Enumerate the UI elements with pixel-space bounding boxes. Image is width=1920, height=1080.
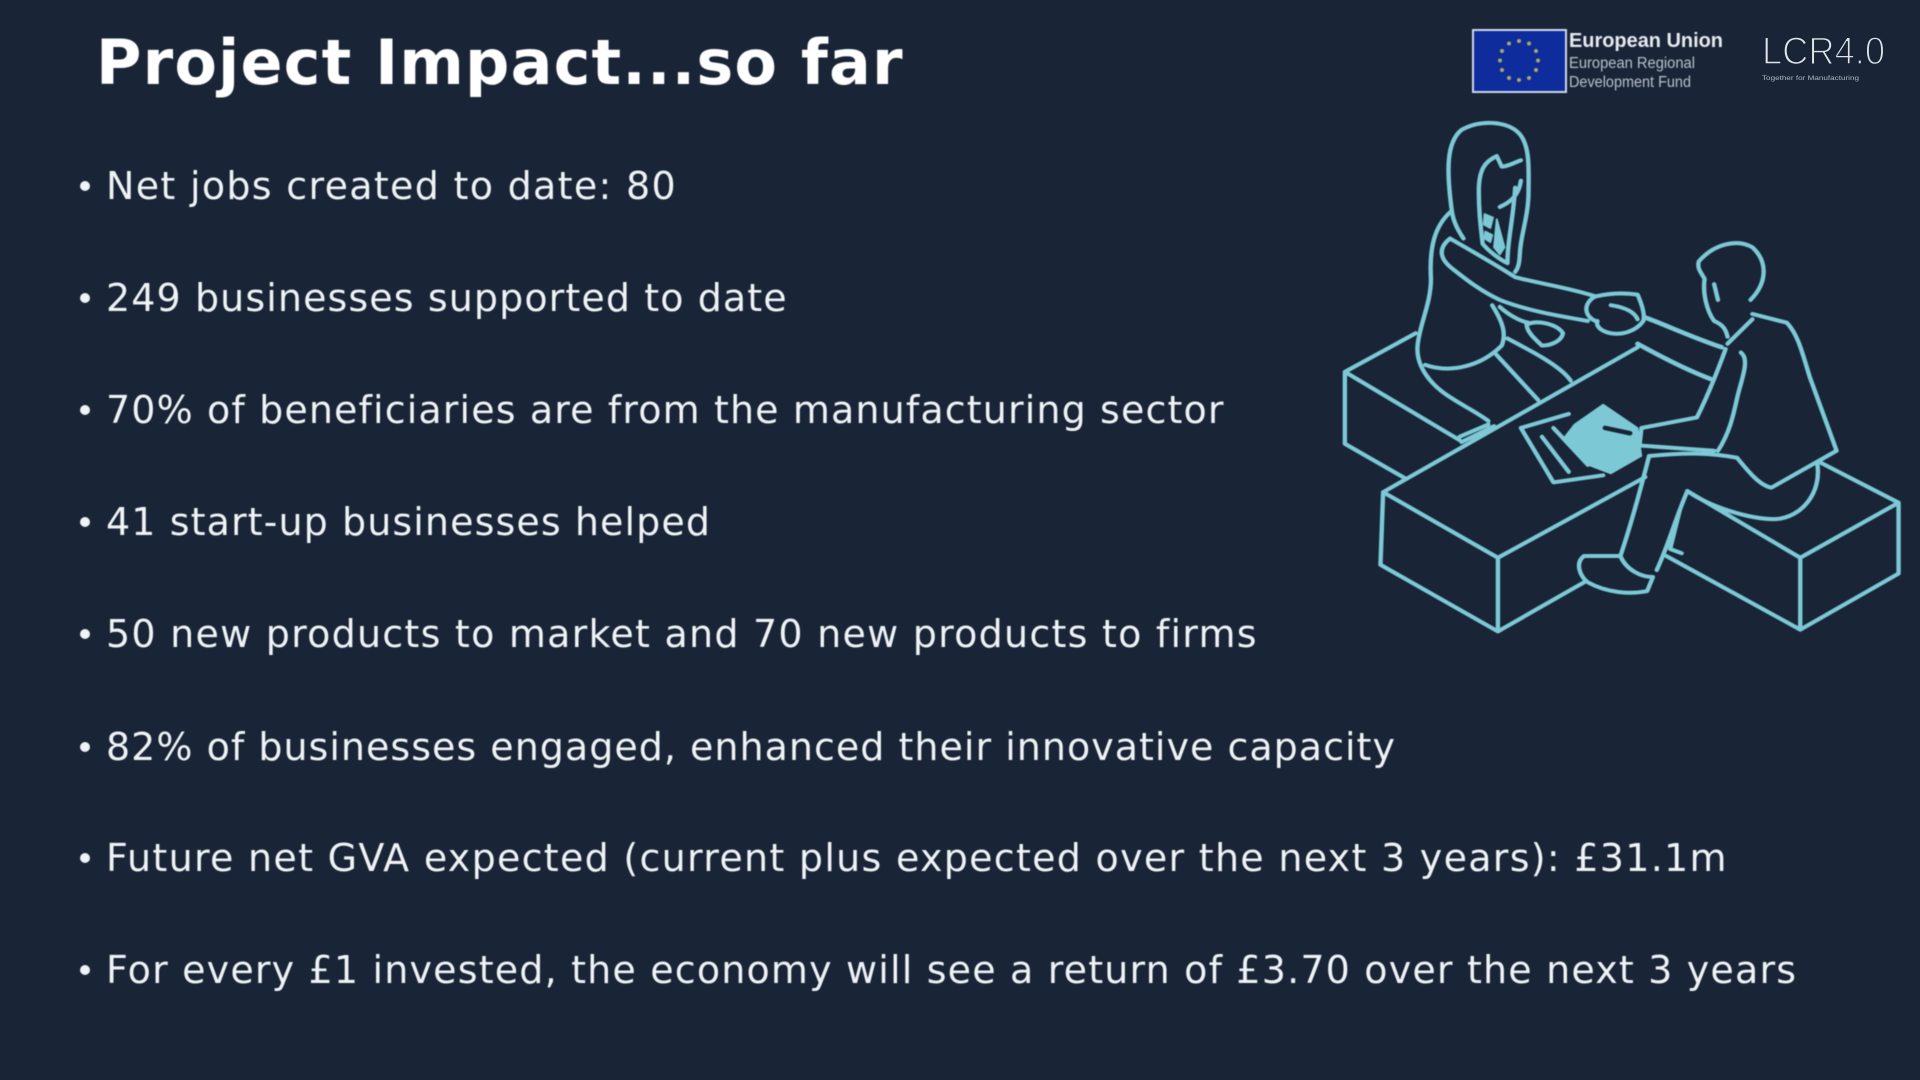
logo: European Union	[1471, 28, 1723, 94]
logo: LCR4.0: Together for Manufacturing	[1762, 75, 1859, 82]
bullet: manufacturing share: 70% of beneficiaries are from the manufacturing sector	[106, 388, 1225, 432]
EU logo text: European Regional	[1569, 55, 1695, 72]
bullet: innovative capacity: 82% of businesses engaged, enhanced their innovative capacity	[106, 725, 1396, 769]
illustration: two people shaking hands across a desk	[1342, 120, 1902, 634]
EU logo text: Development Fund	[1569, 74, 1691, 91]
book and papers on desk	[1521, 404, 1641, 482]
desk block	[1380, 347, 1645, 631]
man figure	[1579, 243, 1837, 593]
EU logo text: European Union	[1569, 30, 1723, 52]
bullet: future GVA: Future net GVA expected (current plus expected over the next 3 years): £31.1m	[106, 836, 1728, 880]
bullet: net jobs: Net jobs created to date: 80	[106, 164, 677, 208]
front-right seat block	[1666, 463, 1899, 630]
logo: LCR4.0: LCR4.0	[1762, 30, 1885, 73]
bullet: businesses supported: 249 businesses supported to date	[106, 276, 788, 320]
icon: EU flag	[1473, 30, 1566, 92]
woman figure	[1417, 123, 1644, 442]
bullet: return on investment: For every £1 invested, the economy will see a return of £3.70 over the next 3 years	[106, 948, 1797, 992]
bullet: start-ups: 41 start-up businesses helped	[106, 500, 711, 544]
bullet: new products: 50 new products to market and 70 new products to firms	[106, 612, 1258, 656]
back-left seat block	[1345, 333, 1460, 479]
title: Project Impact...so far	[96, 26, 904, 99]
EU logo text	[1569, 30, 1723, 91]
